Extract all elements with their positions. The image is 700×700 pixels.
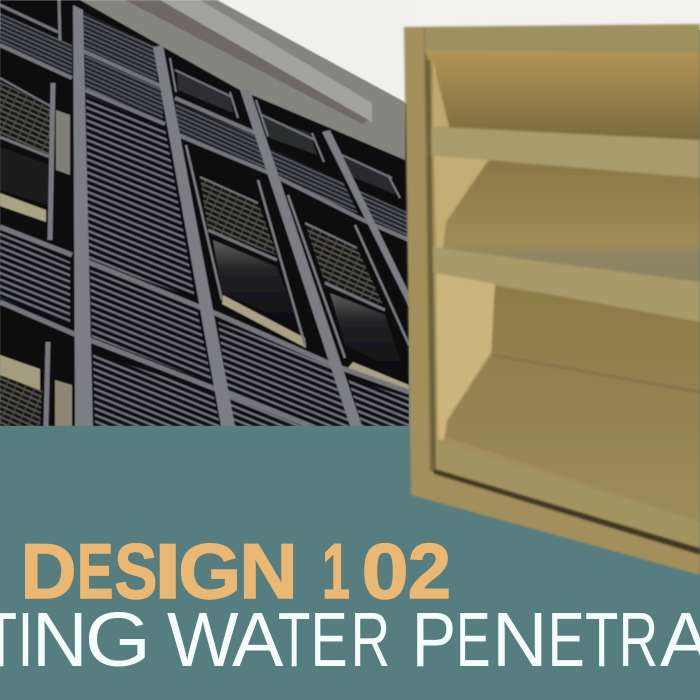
- cornice band: [80, 0, 405, 160]
- heading: design 102: 1: [322, 527, 350, 615]
- top bar: [425, 25, 700, 53]
- frame inner shadow: [424, 27, 436, 472]
- cornice light ledge: [160, 0, 372, 122]
- subheading: water penetration: E: [456, 597, 490, 683]
- heading: design 102: 2: [408, 527, 451, 615]
- lower side wall: [436, 272, 495, 440]
- subheading: water penetration: R: [351, 597, 390, 683]
- building dark mass: [0, 0, 409, 426]
- heading: design 102: [20, 527, 451, 615]
- bar one: [427, 127, 700, 178]
- heading: design 102: 0: [362, 527, 409, 615]
- photo: tan louver product: [404, 24, 700, 575]
- facade frame rows: [0, 5, 409, 426]
- subheading: water penetration: T: [585, 597, 618, 683]
- subheading: water penetration: E: [548, 597, 585, 683]
- subheading: water penetration: T: [278, 597, 310, 683]
- subheading: water penetration: W: [167, 597, 239, 683]
- lower blade: [446, 286, 700, 522]
- subheading: water penetration: P: [412, 597, 456, 683]
- window grid panels: [0, 82, 383, 426]
- subheading: water penetration: I: [18, 597, 34, 683]
- subheading: water penetration: N: [32, 597, 88, 683]
- lower blade ridge: [492, 355, 700, 392]
- left frame dark edge: [428, 60, 434, 470]
- upper side wall: [433, 60, 449, 127]
- sky: [219, 1, 407, 104]
- subheading: water penetration: N: [492, 597, 548, 683]
- outer frame: [404, 24, 700, 575]
- heading: design 102: D: [20, 527, 76, 615]
- subheading: water penetration: E: [311, 597, 348, 683]
- bar two: [430, 247, 700, 322]
- heading: design 102: S: [114, 527, 157, 615]
- heading: design 102: E: [77, 527, 113, 615]
- window interiors: [0, 72, 405, 375]
- facade vertical mullions: [46, 0, 409, 426]
- heading: design 102: I: [154, 527, 182, 615]
- main columns: [73, 5, 409, 426]
- bottom dark gap: [432, 468, 700, 555]
- cornice shadow: [125, 0, 372, 124]
- tan ledges: [0, 110, 409, 426]
- heading: design 102: G: [178, 527, 241, 615]
- sky band: [0, 0, 700, 30]
- heading: design 102: N: [239, 527, 298, 615]
- top blade: [425, 50, 700, 140]
- subheading: water penetration: A: [232, 597, 284, 683]
- middle side wall: [434, 155, 488, 248]
- bottom bar: [432, 440, 700, 548]
- photo: building facade with louvers: [0, 0, 409, 426]
- middle blade: [443, 160, 700, 285]
- subheading: water penetration: R: [619, 597, 658, 683]
- subheading: water penetration: [0, 597, 700, 683]
- subheading: water penetration: G: [85, 597, 151, 683]
- louver panels: [0, 12, 409, 426]
